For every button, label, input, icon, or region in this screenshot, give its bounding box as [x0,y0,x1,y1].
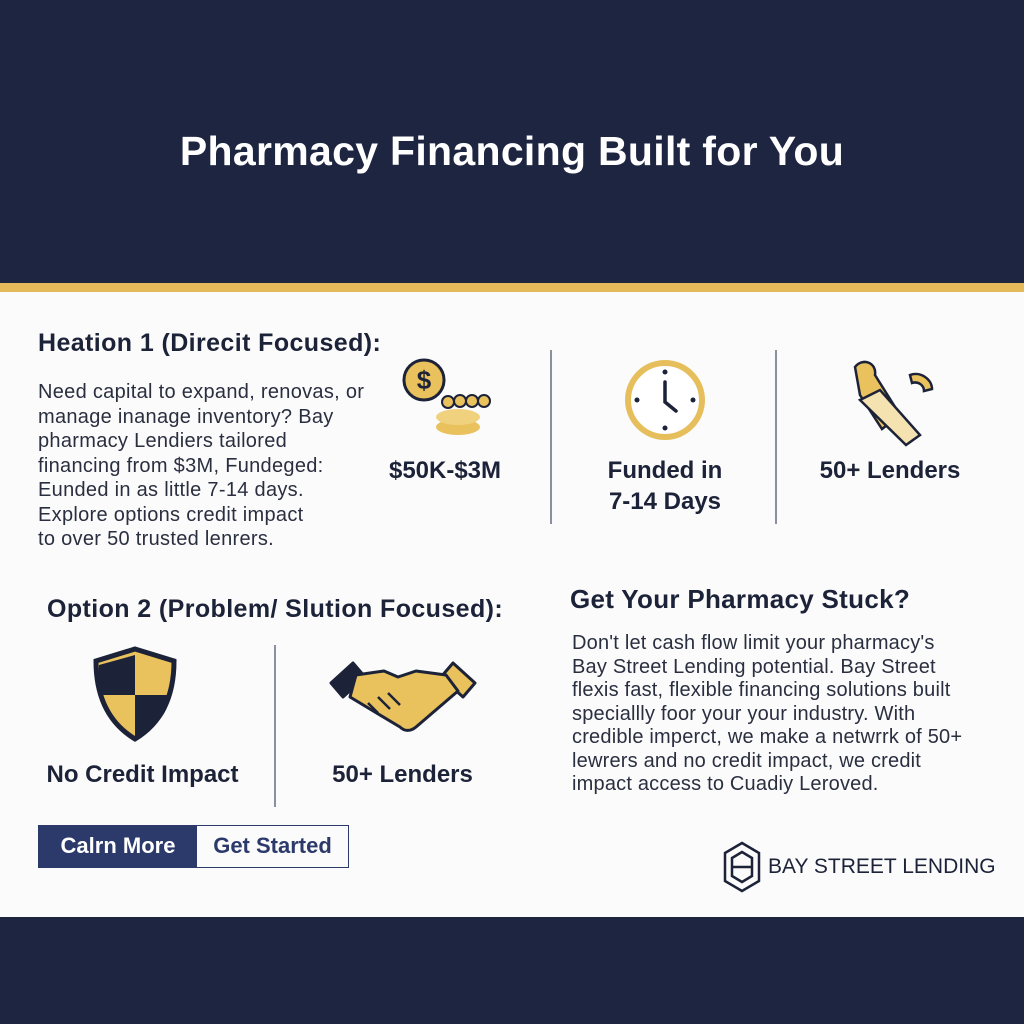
icon: coins [402,358,491,435]
header band [0,0,1024,283]
text block option 1: financing from $3M, Fundeged: [38,454,324,476]
icon: clock [625,360,705,440]
title: Pharmacy Financing Built for You [180,128,844,174]
stat: amount [389,358,501,484]
icon: phone handshake [854,360,934,447]
text block stuck: credible imperct, we make a netwrrk of 50+ [572,726,962,748]
heading: stuck: Get Your Pharmacy Stuck? [570,584,910,614]
label: $50K-$3M [389,457,501,484]
text block stuck: lewrers and no credit impact, we credit [572,750,921,772]
footer band [0,917,1024,1024]
text block option 1: manage inanage inventory? Bay [38,406,334,428]
label: No Credit Impact [46,761,239,788]
text block option 1: Need capital to expand, renovas, or [38,381,364,403]
gold stripe [0,283,1024,292]
text block option 1: Explore options credit impact [38,504,304,526]
feature: lenders [329,661,477,788]
logo [724,842,996,892]
text block stuck: Bay Street Lending potential. Bay Street [572,656,936,678]
heading option 1: Heation 1 (Direcit Focused): [38,329,381,357]
text block stuck: flexis fast, flexible financing solutions built [572,679,950,701]
feature: no credit impact [46,646,239,788]
icon: coins: $ [417,365,432,395]
icon: handshake [329,661,477,732]
button: learn more [39,826,197,867]
text block option 1: to over 50 trusted lenrers. [38,528,274,550]
label: 50+ Lenders [820,457,960,484]
label: 50+ Lenders [332,761,473,788]
brand name: BAY STREET LENDING [768,855,996,878]
buttons [38,825,349,868]
text block stuck: Don't let cash flow limit your pharmacy's [572,632,935,654]
stat: funded [608,360,722,515]
stat: lenders [820,360,960,484]
label: Funded in [608,457,722,484]
button: get started: Get Started [213,833,332,858]
text block option 1 [38,381,364,550]
button: learn more: Calrn More [61,833,175,858]
text block option 1: Eunded in as little 7-14 days. [38,479,304,501]
text block option 1: pharmacy Lendiers tailored [38,430,287,452]
text block stuck: impact access to Cuadiy Leroved. [572,773,879,795]
label: 7-14 Days [609,488,721,515]
text block stuck: speciallly foor your your industry. With [572,702,915,724]
label [608,457,722,515]
icon: shield [94,646,176,742]
text block stuck [572,632,962,795]
icon: logo mark [724,842,760,892]
heading option 2: Option 2 (Problem/ Slution Focused): [47,595,503,623]
